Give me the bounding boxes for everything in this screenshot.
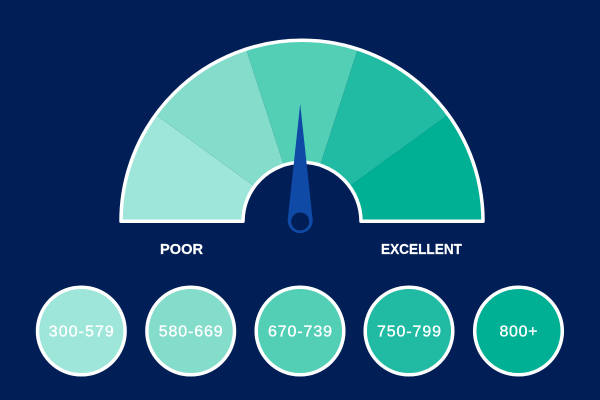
- score text: 300-579: [49, 324, 114, 340]
- needle hub: [291, 212, 309, 230]
- score circle: 800+: [475, 287, 562, 375]
- score circle: 750-799: [365, 287, 453, 375]
- gauge outline: [121, 40, 483, 221]
- needle: [288, 104, 313, 233]
- gauge segment: excellent: [350, 115, 483, 221]
- score text: 580-669: [159, 324, 223, 340]
- score circle: 580-669: [147, 287, 234, 375]
- label: excellent: EXCELLENT: [381, 241, 462, 258]
- score text: 750-799: [377, 324, 441, 340]
- label: poor: POOR: [160, 241, 203, 258]
- score text: 800+: [500, 324, 538, 340]
- gauge segment: good: [246, 40, 358, 165]
- gauge segment: fair: [156, 49, 284, 186]
- score circle: 670-739: [256, 287, 344, 375]
- score text: 670-739: [268, 324, 332, 340]
- gauge segment: poor: [121, 115, 254, 221]
- gauge segment: very good: [320, 49, 448, 186]
- score circle: 300-579: [38, 287, 125, 375]
- gauge dial: [121, 40, 483, 221]
